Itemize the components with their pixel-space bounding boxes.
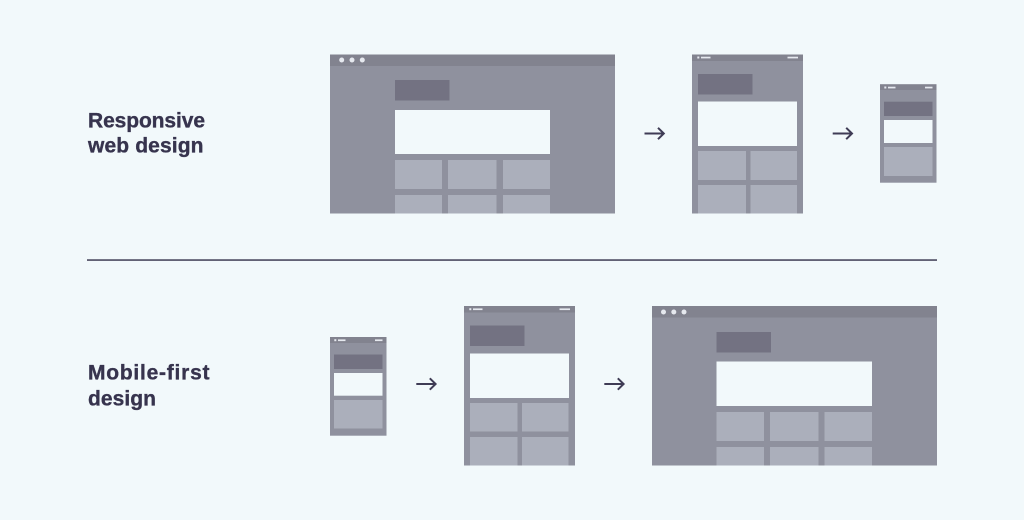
heading: mobile-first design: design [88,388,156,411]
arrow: desktop to tablet [644,128,664,139]
wireframe: phone, mobile-first row [330,337,386,436]
arrow: tablet to phone [833,128,852,139]
heading: mobile-first design [88,362,210,411]
arrow: tablet to desktop [604,378,624,390]
wireframe: desktop, responsive row [330,54,615,214]
wireframe: desktop, mobile-first row [652,306,937,466]
wireframe: phone, responsive row [880,84,936,183]
wireframe: tablet, mobile-first row [464,306,575,466]
wireframe: tablet, responsive row [692,54,803,214]
heading: responsive web design: web design [87,135,204,158]
arrow: phone to tablet [416,378,436,390]
heading: responsive web design [87,110,205,158]
divider line [87,259,937,261]
heading: mobile-first design: Mobile-first [88,362,210,384]
heading: responsive web design: Responsive [88,110,205,132]
